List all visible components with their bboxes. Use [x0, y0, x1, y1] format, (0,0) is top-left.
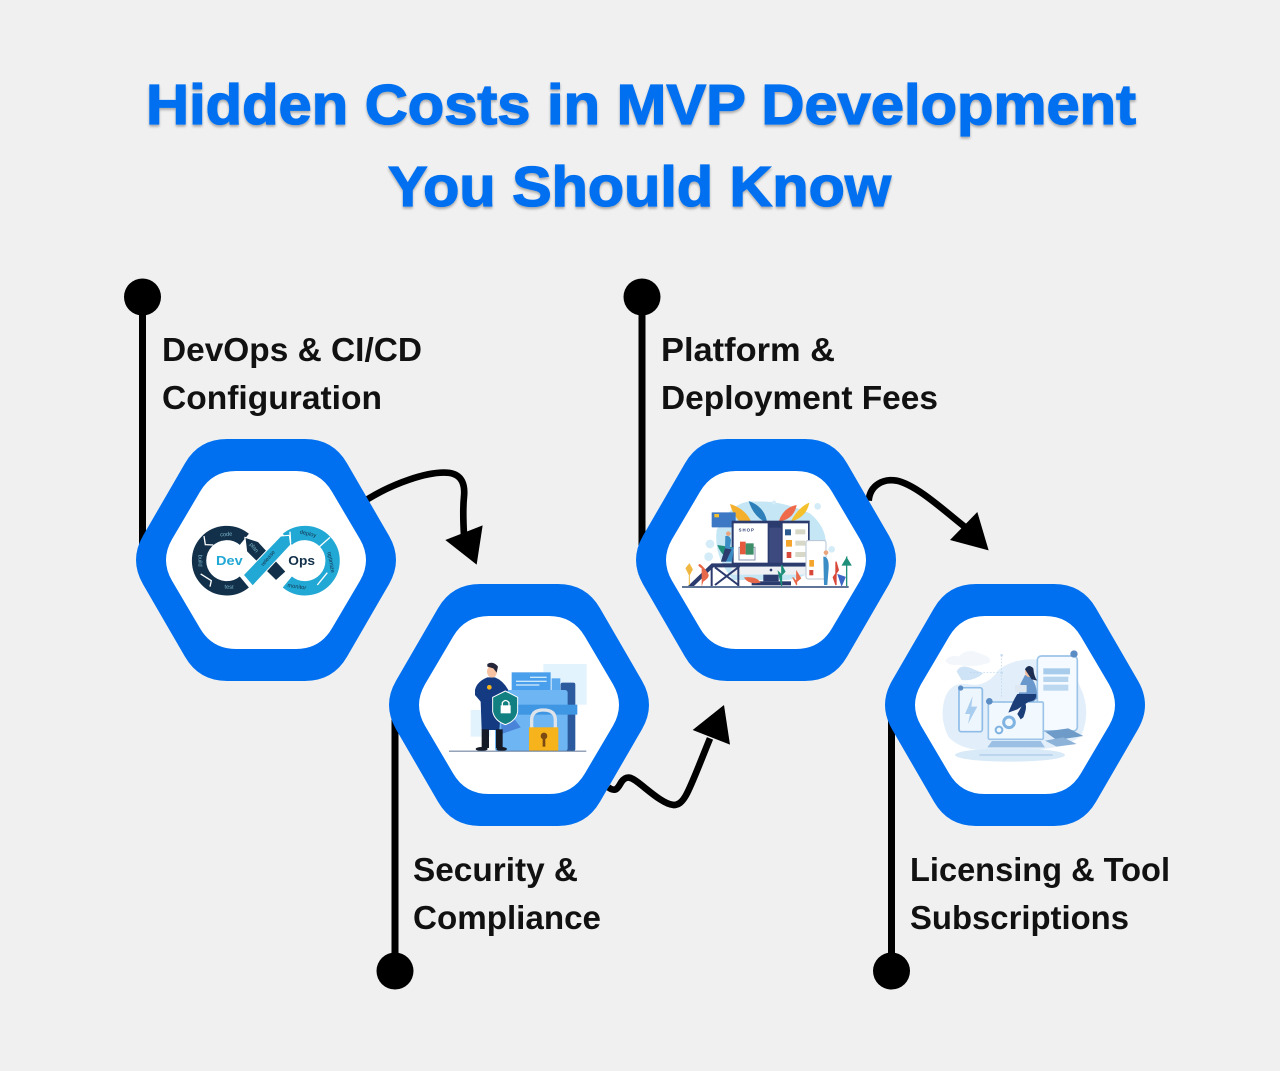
- icon: DevOps infinity loop: test: [224, 584, 234, 591]
- arrow: step 2 to step 3: [608, 705, 730, 805]
- heading: Platform & Deployment Fees: Platform &: [661, 331, 835, 368]
- heading: DevOps & CI/CD Configuration: DevOps & CI/CD: [162, 331, 422, 368]
- icon: DevOps infinity loop: Ops: [288, 554, 315, 568]
- title: You Should Know: [388, 155, 892, 219]
- heading: Platform & Deployment Fees: [661, 331, 938, 416]
- icon: DevOps infinity loop: code: [220, 532, 233, 538]
- arrow: step 3 to step 4: [869, 480, 989, 550]
- icon: DevOps infinity loop: Dev: [216, 554, 243, 568]
- icon: online shop storefront: [682, 501, 851, 588]
- timeline marker: step 1: [124, 278, 161, 557]
- heading: Licensing & Tool Subscriptions: [910, 851, 1170, 936]
- icon: DevOps infinity loop: plan: [248, 542, 259, 554]
- icon: DevOps infinity loop: build: [197, 555, 203, 567]
- panel: hexagon 1 DevOps: [136, 439, 396, 681]
- heading: Licensing & Tool Subscriptions: Subscriptions: [910, 899, 1129, 936]
- icon: DevOps infinity loop: optimize: [326, 552, 335, 573]
- heading: DevOps & CI/CD Configuration: [162, 331, 422, 416]
- heading: Security & Compliance: [413, 851, 601, 936]
- icon: online shop storefront: SHOP: [739, 528, 755, 533]
- heading: Platform & Deployment Fees: Deployment Fees: [661, 379, 938, 416]
- icon: DevOps infinity loop: release: [260, 550, 277, 568]
- title: Hidden Costs in MVP Development: [146, 73, 1136, 137]
- icon: security guard with shield and padlock: [449, 663, 587, 752]
- icon: DevOps infinity loop: monitor: [287, 583, 307, 592]
- heading: DevOps & CI/CD Configuration: Configuration: [162, 379, 382, 416]
- icon: DevOps infinity loop: [197, 530, 335, 592]
- panel: hexagon 4 Licensing: [885, 584, 1145, 826]
- icon: person on laptop with phone and tools: [943, 650, 1086, 762]
- timeline marker: step 2: [376, 710, 414, 990]
- panel: hexagon 2 Security: [389, 584, 649, 826]
- arrow: step 1 to step 2: [367, 473, 483, 565]
- heading: Licensing & Tool Subscriptions: Licensing & Tool: [910, 851, 1170, 888]
- heading: Security & Compliance: Compliance: [413, 899, 601, 936]
- panel: hexagon 3 Platform: [636, 439, 896, 681]
- icon: DevOps infinity loop: deploy: [299, 530, 317, 539]
- title: [146, 73, 1136, 219]
- timeline marker: step 3: [624, 278, 660, 575]
- timeline marker: step 4: [873, 710, 910, 990]
- heading: Security & Compliance: Security &: [413, 851, 578, 888]
